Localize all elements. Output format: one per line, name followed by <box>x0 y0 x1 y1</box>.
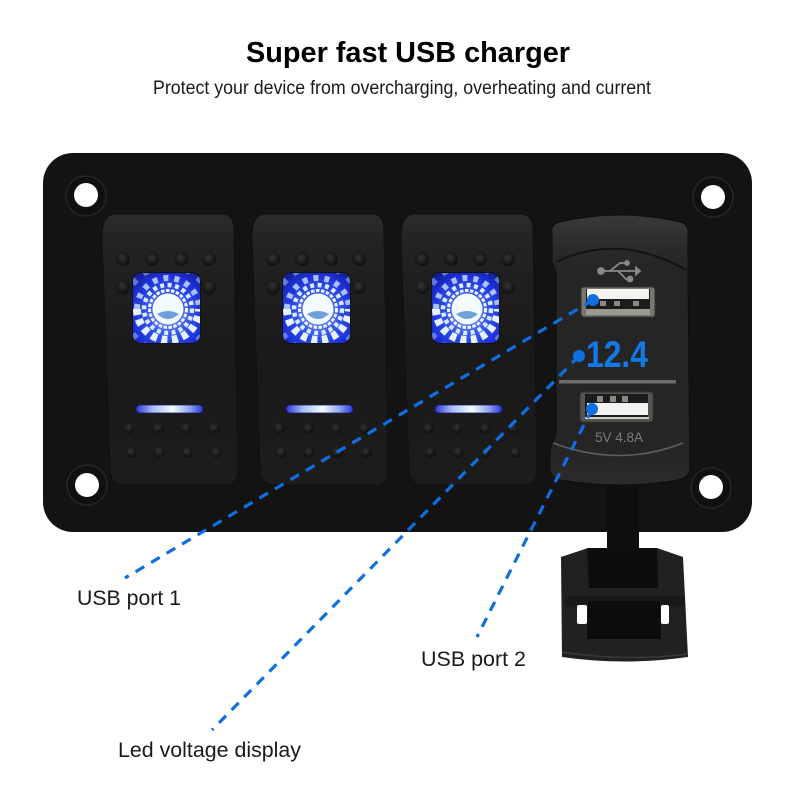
USB charger module <box>550 215 690 485</box>
label: USB port 2: USB port 2 <box>421 648 526 671</box>
cover window left <box>577 605 587 624</box>
label: Led voltage display: Led voltage display <box>118 739 302 762</box>
subtitle: Protect your device from overcharging, overheating and current <box>153 78 652 99</box>
label: USB port 1: USB port 1 <box>77 587 181 610</box>
USB port 1 <box>581 287 655 317</box>
cover window right <box>661 605 669 624</box>
dashed leader: USB port 1 <box>125 294 599 578</box>
rocker switch 3 <box>401 214 537 485</box>
panel: switch mounting plate <box>43 153 752 532</box>
USB port 2 <box>580 392 653 422</box>
rocker switch 1 <box>102 214 238 485</box>
rating label: 5V 4.8A <box>595 429 644 445</box>
icon: mounting hole top left <box>66 176 106 216</box>
icon: mounting hole bottom right <box>691 468 731 508</box>
dashed leader: USB port 2 <box>477 403 598 637</box>
icon: USB symbol <box>598 261 640 282</box>
dashed leader: LED voltage display <box>212 350 585 730</box>
strap of the dust cover <box>607 480 639 552</box>
icon: mounting hole bottom left <box>67 465 107 505</box>
title: Super fast USB charger <box>246 37 570 69</box>
dust cover <box>561 548 688 662</box>
LED voltage display: 12.4 <box>586 334 648 375</box>
rocker switch 2 <box>252 214 388 485</box>
icon: mounting hole top right <box>693 177 733 217</box>
